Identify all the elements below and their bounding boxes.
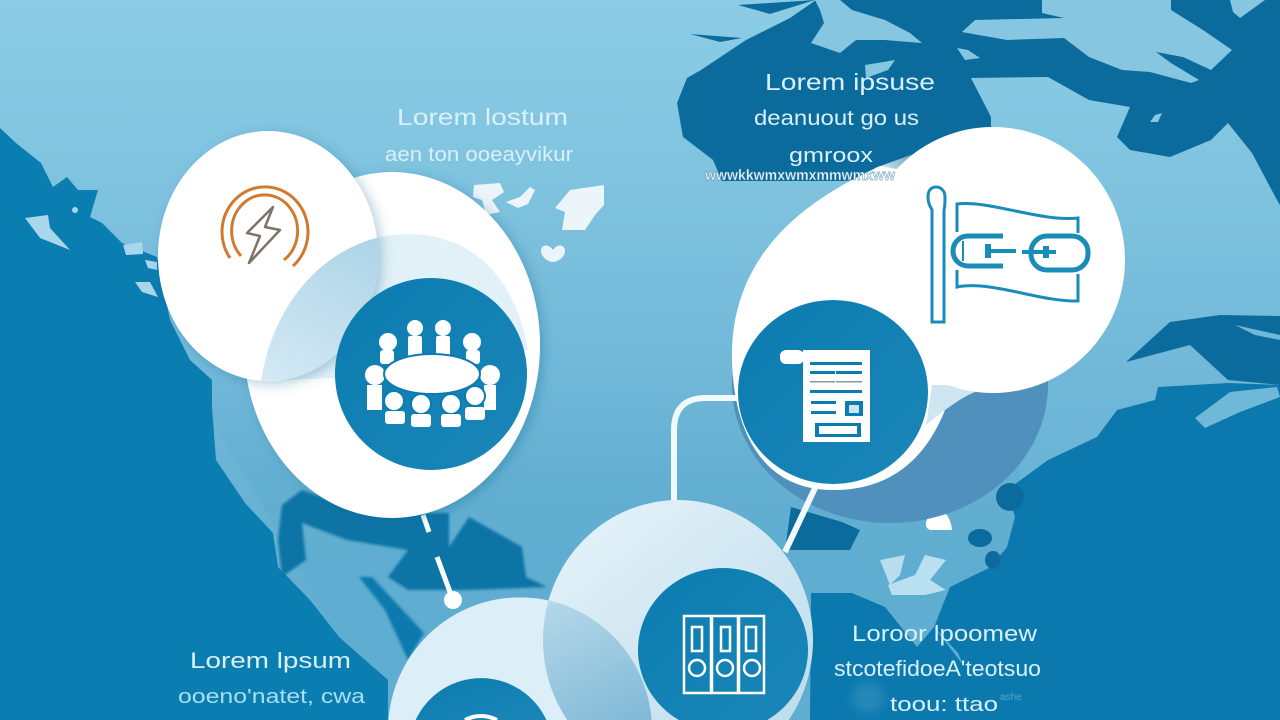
map: top landmass bbox=[677, 0, 1280, 205]
icon: binders bbox=[684, 616, 764, 693]
map: right landmass bbox=[934, 315, 1280, 720]
text block: lower right bbox=[834, 621, 1041, 716]
map: central dark gulf bbox=[278, 490, 547, 660]
map: lower dark sea bbox=[785, 483, 1024, 720]
light patch near lower text bbox=[852, 683, 884, 713]
white back shape bbox=[732, 166, 1000, 490]
text block: upper right: gmroox bbox=[789, 145, 873, 167]
dark coastal blobs bbox=[968, 483, 1024, 569]
text block: lower right: stcotefidoeA'teotsuo bbox=[834, 656, 1041, 681]
blue-grey back circle bbox=[732, 247, 1048, 523]
left coast islands bbox=[25, 207, 158, 297]
top islands bbox=[811, 0, 1265, 122]
connector: diagonal line bbox=[785, 488, 815, 552]
text block: lower right: toou: ttao bbox=[890, 694, 998, 716]
icon: lightning in orange arcs bbox=[222, 187, 308, 266]
flag circle bbox=[861, 127, 1125, 393]
text block: upper right: Lorem ipsuse bbox=[765, 69, 935, 95]
text block: upper left: Lorem lostum bbox=[397, 104, 568, 130]
lens overlap bbox=[261, 238, 378, 381]
small world map fragments bbox=[473, 183, 604, 262]
bottom lens overlap bbox=[543, 600, 652, 720]
text block: lower right: ashe bbox=[1000, 692, 1022, 703]
bottom right pale circle bbox=[543, 500, 813, 720]
circle group: document and flag bbox=[732, 127, 1125, 490]
fading white tip bbox=[875, 148, 940, 195]
icon: flag with broken chain bbox=[928, 187, 1088, 322]
text block: upper right: wwwkkwmxwmxmmwmxww bbox=[704, 167, 895, 184]
large white circle bbox=[244, 172, 540, 518]
text block: upper left: aen ton ooeayvikur bbox=[385, 144, 573, 166]
pale inner cap bbox=[261, 234, 528, 381]
dark meeting disc bbox=[335, 278, 527, 470]
icon: partial arc bbox=[465, 716, 497, 720]
dark document disc bbox=[738, 300, 928, 484]
map: white cloud and light fragments bbox=[880, 510, 952, 595]
text block: lower left: Lorem lpsum bbox=[190, 648, 351, 673]
icon: meeting table with people bbox=[365, 320, 500, 427]
pale wedge bbox=[926, 385, 975, 425]
text block: lower right: Loroor lpoomew bbox=[852, 621, 1037, 646]
text block: upper right: deanuout go us bbox=[754, 107, 919, 130]
text block: lower left: ooeno'natet, cwa bbox=[178, 686, 366, 708]
bottom left pale circle bbox=[388, 597, 652, 720]
top sliver islands bbox=[690, 0, 815, 42]
dark binder disc bbox=[638, 568, 808, 720]
circle group: binders and bottom bbox=[388, 500, 813, 720]
text block: upper right bbox=[704, 69, 935, 184]
text block: lower left bbox=[178, 648, 366, 708]
text block: upper left bbox=[385, 104, 573, 166]
icon: document bbox=[780, 350, 870, 442]
circle group: meeting bbox=[158, 131, 540, 518]
right light islands bbox=[1195, 325, 1280, 428]
bottom left dark disc bbox=[416, 678, 546, 720]
map: central land bbox=[212, 380, 1020, 720]
connector: left line and dot bbox=[423, 515, 462, 609]
energy circle bbox=[158, 131, 378, 381]
map: left landmass bbox=[0, 128, 388, 720]
connector: rounded elbow bbox=[674, 398, 745, 510]
